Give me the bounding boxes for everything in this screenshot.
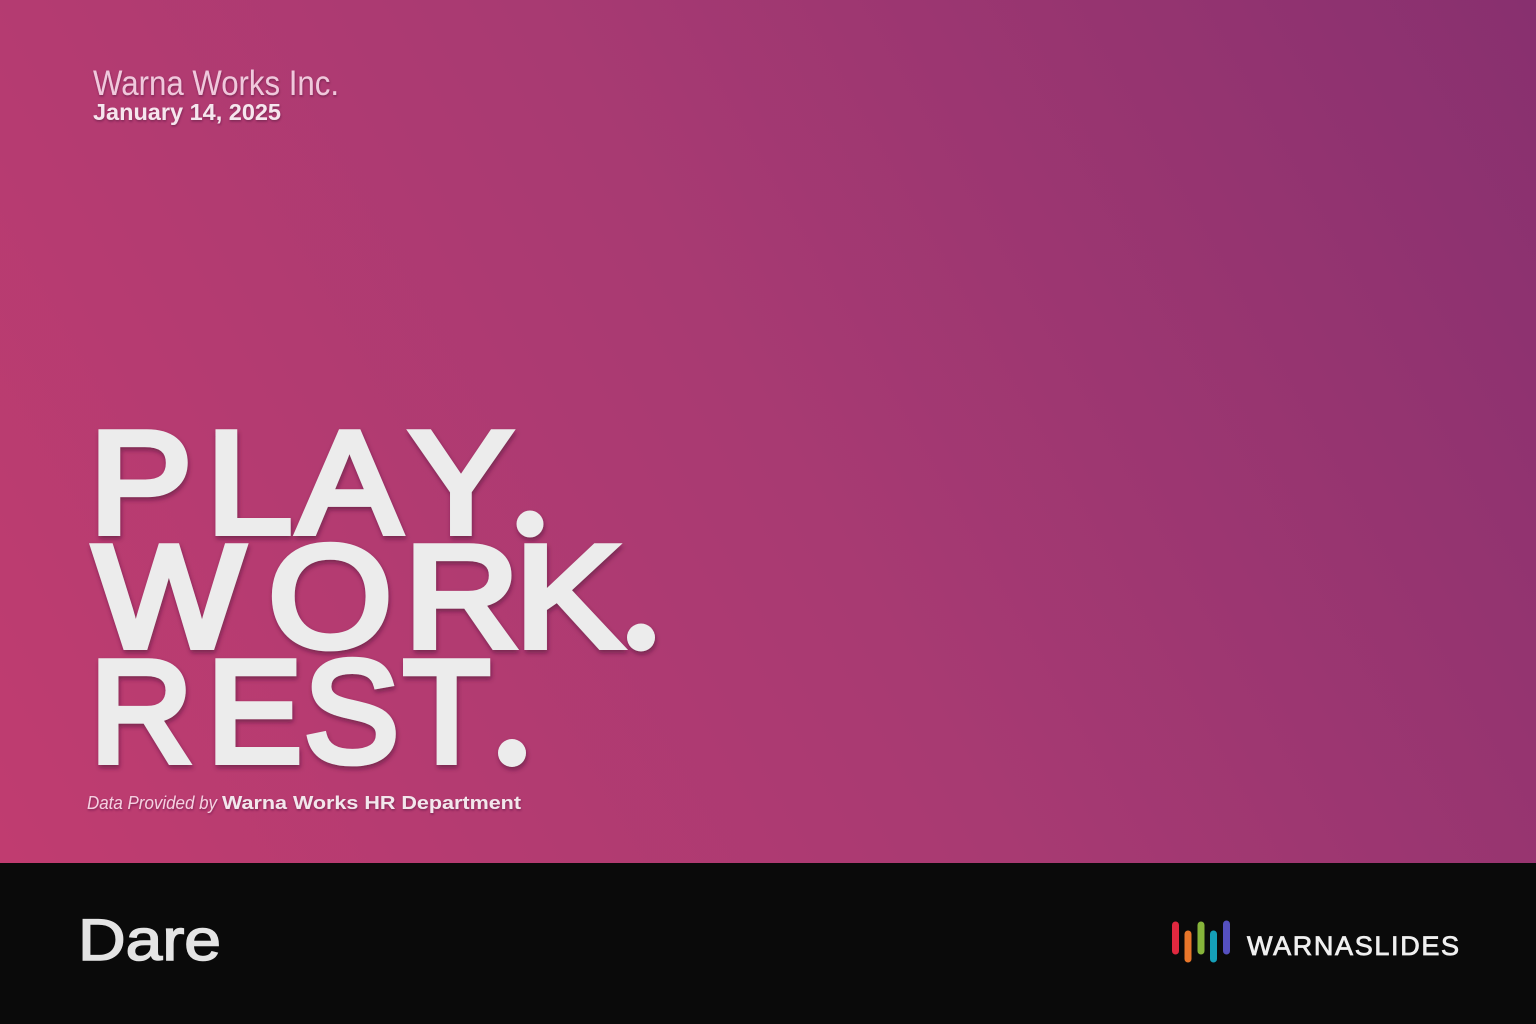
credit label: Data Provided by xyxy=(87,793,218,813)
footer template name: Dare xyxy=(78,908,221,973)
data source credit xyxy=(87,793,521,813)
title line: rest: REST. xyxy=(90,631,532,793)
company name: Warna Works Inc. xyxy=(93,64,339,103)
credit department: Warna Works HR Department xyxy=(222,793,521,813)
main title xyxy=(90,401,663,793)
round period: play xyxy=(516,510,544,538)
icon: warnaslides logo bars xyxy=(1176,924,1226,959)
title line: play: PLAY. xyxy=(90,401,551,564)
title line: work: WORK. xyxy=(94,516,663,678)
round period: rest xyxy=(498,739,526,767)
brand name: WARNASLIDES xyxy=(1247,931,1459,961)
footer bar xyxy=(0,863,1536,1024)
date: January 14, 2025 xyxy=(93,99,281,125)
round period: work xyxy=(627,624,655,652)
